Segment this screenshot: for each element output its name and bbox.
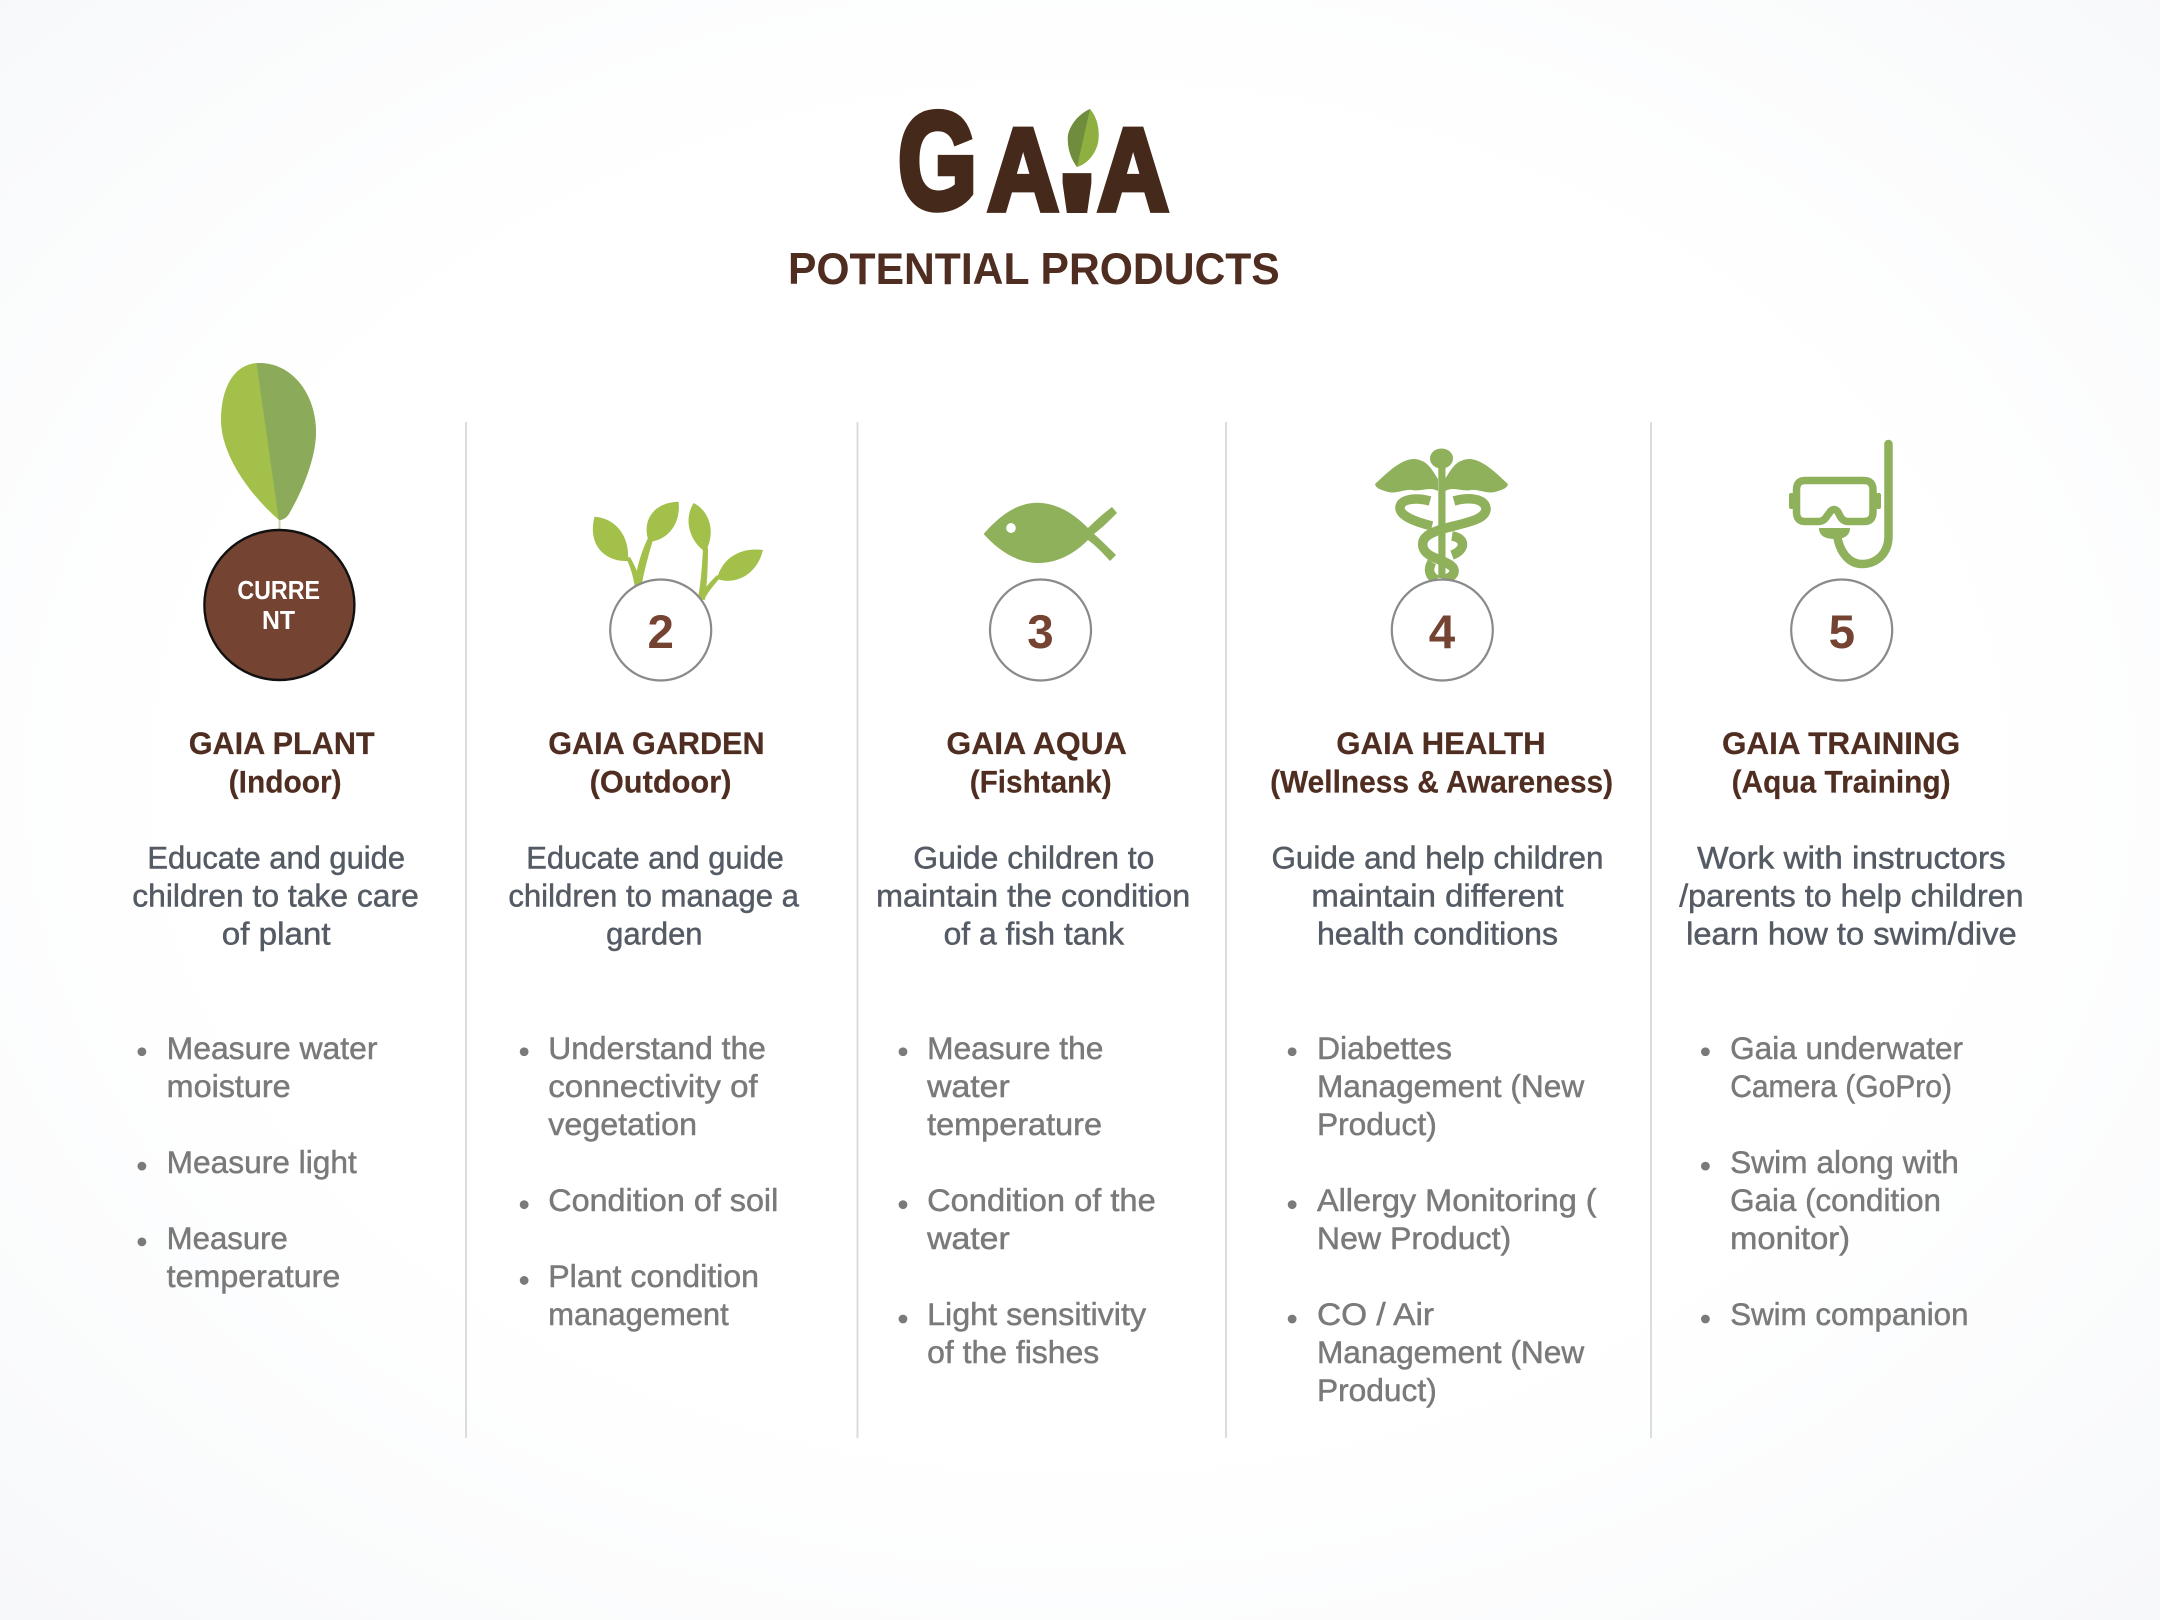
heading: Gaia Aqua: (Fishtank) (970, 765, 1112, 800)
panel: Gaia Aqua (876, 503, 1190, 1370)
bullet list: moisture (167, 1069, 291, 1104)
description: Educate and guide (526, 840, 784, 875)
description: learn how to swim/dive (1686, 916, 2017, 951)
description (132, 840, 419, 951)
description: Work with instructors (1697, 840, 2006, 875)
heading: Gaia Garden (548, 726, 765, 800)
bullet list: Camera (GoPro) (1730, 1069, 1952, 1104)
bullet list: Swim companion (1730, 1297, 1969, 1332)
logo: GAIA wordmark with leaf: A (988, 104, 1059, 235)
description: garden (606, 916, 703, 951)
badge: number 2 (610, 580, 711, 680)
bullet list: New Product) (1317, 1221, 1511, 1256)
heading: Gaia Health: (Wellness & Awareness) (1270, 765, 1613, 800)
bullet list: Condition of soil (548, 1183, 778, 1218)
description (1679, 840, 2024, 951)
bullet list: Plant condition (548, 1259, 759, 1294)
bullet list: Product) (1317, 1107, 1437, 1142)
heading: Gaia Training: (Aqua Training) (1732, 765, 1951, 800)
heading: Gaia Health: GAIA HEALTH (1336, 726, 1546, 761)
bullet list: monitor) (1730, 1221, 1850, 1256)
description: Guide and help children (1271, 840, 1603, 875)
heading: Gaia Aqua: GAIA AQUA (946, 726, 1127, 761)
bullet list: Swim along with (1730, 1145, 1959, 1180)
bullet list: Measure light (167, 1145, 357, 1180)
logo: GAIA wordmark with leaf: I (1049, 161, 1105, 226)
bullet list: water (926, 1221, 1010, 1256)
badge: current (204, 530, 354, 680)
badge: number 3: 3 (1027, 606, 1054, 659)
bullet list: Product) (1317, 1373, 1437, 1408)
badge: number 2: 2 (647, 606, 674, 659)
bullet list: Measure the (927, 1031, 1103, 1066)
bullet list: temperature (167, 1259, 340, 1294)
icon: fish (984, 503, 1117, 563)
panel: Gaia Garden (508, 502, 800, 1332)
icon: large leaf (221, 363, 316, 529)
badge: number 4 (1392, 580, 1493, 680)
bullet list: management (548, 1297, 729, 1332)
heading: Gaia Garden: GAIA GARDEN (548, 726, 765, 761)
icon: sprouts (593, 502, 763, 600)
bullet list: Measure water (167, 1031, 377, 1066)
bullet list: Understand the (548, 1031, 766, 1066)
bullet list (899, 1031, 1156, 1370)
description (876, 840, 1190, 951)
bullet list (520, 1031, 778, 1332)
badge: current: CURRE (237, 575, 320, 605)
logo: GAIA wordmark with leaf (898, 84, 1169, 237)
heading: Gaia Health (1270, 726, 1613, 800)
description: health conditions (1317, 916, 1558, 951)
heading: Gaia Aqua (946, 726, 1127, 800)
heading: Gaia Plant (189, 726, 375, 800)
description: maintain different (1311, 878, 1564, 913)
bullet list (1701, 1031, 1969, 1332)
description (1271, 840, 1603, 951)
description: maintain the condition (876, 878, 1190, 913)
bullet list: CO / Air (1317, 1297, 1434, 1332)
bullet list: Allergy Monitoring ( (1317, 1183, 1597, 1218)
description: of plant (222, 916, 331, 951)
badge: number 4: 4 (1429, 606, 1456, 659)
bullet list: Measure (167, 1221, 288, 1256)
description: /parents to help children (1679, 878, 2024, 913)
description: of a fish tank (944, 916, 1125, 951)
icon: snorkel mask (1789, 444, 1888, 564)
description (508, 840, 800, 951)
bullet list: of the fishes (927, 1335, 1099, 1370)
bullet list: vegetation (548, 1107, 697, 1142)
description: Guide children to (913, 840, 1154, 875)
bullet list: connectivity of (548, 1069, 758, 1104)
bullet list: water (926, 1069, 1010, 1104)
bullet list: Management (New (1317, 1069, 1585, 1104)
description: children to take care (132, 878, 419, 913)
title: POTENTIAL PRODUCTS (788, 243, 1280, 294)
bullet list: Gaia underwater (1730, 1031, 1963, 1066)
panel: Gaia Plant (132, 363, 419, 1294)
description: children to manage a (508, 878, 800, 913)
heading: Gaia Plant: GAIA PLANT (189, 726, 375, 761)
heading: Gaia Plant: (Indoor) (229, 765, 342, 800)
logo: GAIA wordmark with leaf: A (1098, 104, 1169, 235)
bullet list (137, 1031, 377, 1294)
badge: number 5: 5 (1829, 606, 1855, 659)
heading: Gaia Training (1722, 726, 1960, 800)
heading: Gaia Training: GAIA TRAINING (1722, 726, 1960, 761)
bullet list (1288, 1031, 1597, 1408)
bullet list: Light sensitivity (927, 1297, 1147, 1332)
logo: GAIA wordmark with leaf: G (898, 84, 977, 237)
description: Educate and guide (147, 840, 405, 875)
heading: Gaia Garden: (Outdoor) (590, 765, 731, 800)
panel: Gaia Health (1270, 448, 1613, 1408)
badge: number 5 (1791, 580, 1892, 680)
bullet list: Gaia (condition (1730, 1183, 1941, 1218)
bullet list: temperature (927, 1107, 1102, 1142)
bullet list: Condition of the (927, 1183, 1156, 1218)
bullet list: Management (New (1317, 1335, 1585, 1370)
bullet list: Diabettes (1317, 1031, 1452, 1066)
panel: Gaia Training (1679, 444, 2024, 1332)
badge: number 3 (990, 580, 1091, 680)
icon: logo leaf (1068, 109, 1099, 167)
icon: caduceus (1375, 448, 1508, 580)
badge: current: NT (262, 605, 295, 635)
